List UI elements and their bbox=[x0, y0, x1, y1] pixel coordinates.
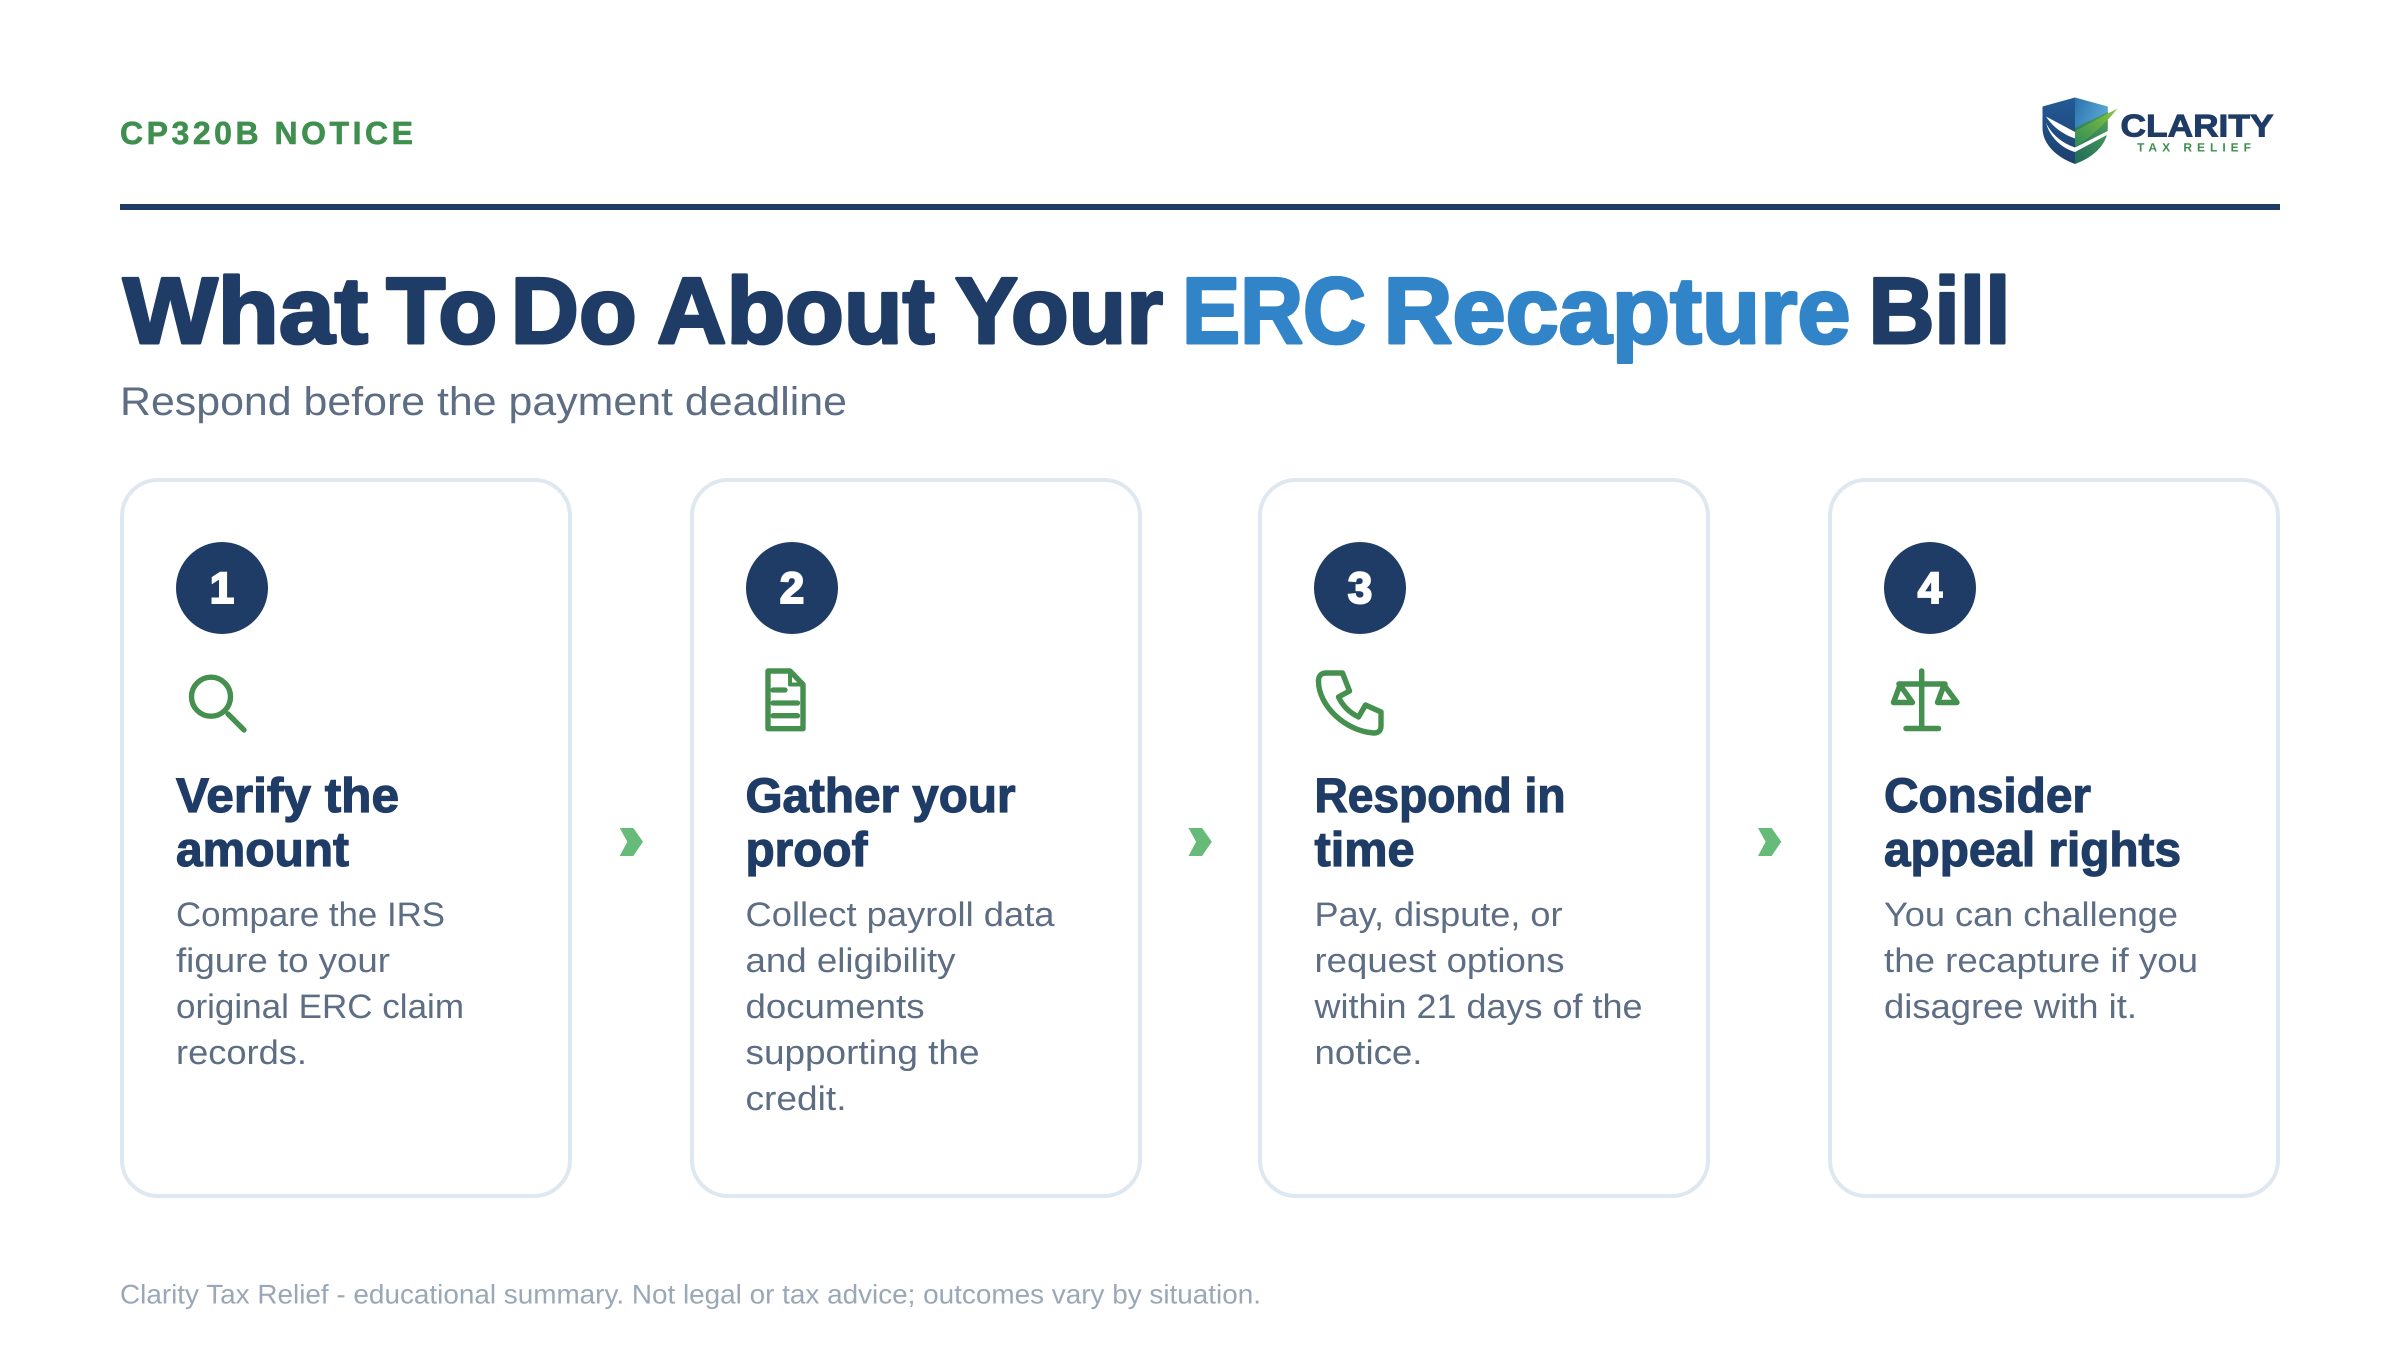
body text 1: figure to your bbox=[176, 942, 390, 980]
card frame 3 bbox=[1260, 480, 1708, 1196]
body text 3: within 21 days of the bbox=[1313, 988, 1642, 1026]
logo tagline: TAX RELIEF bbox=[2137, 141, 2251, 155]
number badge 1: 1 bbox=[210, 564, 234, 613]
body text 1: original ERC claim bbox=[176, 988, 464, 1026]
panel: step 1 verify the amount bbox=[122, 480, 570, 1196]
title: About bbox=[657, 258, 935, 363]
number badge 3 bbox=[1314, 542, 1406, 634]
body text 2: documents bbox=[746, 988, 924, 1026]
heading 4: Consider bbox=[1884, 769, 2091, 823]
body text 4: You can challenge bbox=[1884, 896, 2178, 934]
icon: document bbox=[768, 671, 803, 729]
body text 1 bbox=[176, 896, 464, 1072]
panel: step 3 respond in time bbox=[1260, 480, 1708, 1196]
icon: phone bbox=[1318, 673, 1381, 733]
card frame 1 bbox=[122, 480, 570, 1196]
heading 2 bbox=[746, 769, 1016, 877]
title: ERC bbox=[1182, 258, 1366, 363]
title bbox=[123, 258, 2010, 363]
number badge 2 bbox=[746, 542, 838, 634]
title: Recapture bbox=[1384, 258, 1850, 363]
panel: step 2 gather your proof bbox=[692, 480, 1140, 1196]
title: Do bbox=[511, 258, 637, 363]
title: What bbox=[123, 258, 368, 363]
body text 3: notice. bbox=[1314, 1034, 1422, 1072]
heading 2: proof bbox=[746, 823, 868, 877]
heading 1: amount bbox=[176, 823, 349, 877]
number badge 4: 4 bbox=[1918, 564, 1943, 613]
heading 4: appeal rights bbox=[1884, 823, 2181, 877]
icon: magnifying glass bbox=[192, 677, 244, 730]
header rule bbox=[120, 204, 2280, 210]
logo shield icon bbox=[2042, 98, 2118, 164]
arrow 2 to 3 bbox=[1188, 828, 1212, 856]
body text 1: records. bbox=[176, 1034, 307, 1072]
logo: Clarity Tax Relief bbox=[2042, 98, 2274, 164]
body text 4: disagree with it. bbox=[1884, 988, 2137, 1026]
footer disclaimer: Clarity Tax Relief - educational summary. Not legal or tax advice; outcomes vary by situation. bbox=[120, 1280, 1261, 1310]
heading 3 bbox=[1314, 769, 1566, 877]
number badge 4 bbox=[1884, 542, 1976, 634]
number badge 3: 3 bbox=[1348, 564, 1372, 613]
logo wordmark: CLARITY bbox=[2120, 108, 2274, 144]
body text 3: request options bbox=[1314, 942, 1564, 980]
body text 2: Collect payroll data bbox=[746, 896, 1055, 934]
body text 2: supporting the bbox=[746, 1034, 980, 1072]
number badge 2: 2 bbox=[780, 564, 804, 613]
number badge 1 bbox=[176, 542, 268, 634]
panel: step 4 consider appeal rights bbox=[1830, 480, 2278, 1196]
title: Your bbox=[955, 258, 1163, 363]
card frame 4 bbox=[1830, 480, 2278, 1196]
arrow 3 to 4 bbox=[1758, 828, 1781, 856]
body text 2: credit. bbox=[746, 1080, 846, 1118]
subtitle: Respond before the payment deadline bbox=[120, 380, 847, 424]
heading 3: time bbox=[1314, 823, 1414, 877]
body text 2: and eligibility bbox=[746, 942, 956, 980]
heading 1 bbox=[176, 769, 399, 877]
body text 3: Pay, dispute, or bbox=[1314, 896, 1562, 934]
body text 1: Compare the IRS bbox=[176, 896, 445, 934]
heading 4 bbox=[1884, 769, 2181, 877]
title: To bbox=[386, 258, 497, 363]
heading 2: Gather your bbox=[746, 769, 1016, 823]
arrow 1 to 2 bbox=[620, 828, 643, 856]
title: Bill bbox=[1868, 258, 2010, 363]
body text 3 bbox=[1313, 896, 1642, 1072]
eyebrow: CP320B NOTICE: CP320B NOTICE bbox=[120, 115, 413, 151]
body text 4 bbox=[1884, 896, 2198, 1026]
body text 4: the recapture if you bbox=[1884, 942, 2198, 980]
heading 1: Verify the bbox=[176, 769, 399, 823]
body text 2 bbox=[746, 896, 1055, 1118]
icon: balance scales bbox=[1894, 671, 1957, 728]
card frame 2 bbox=[692, 480, 1140, 1196]
heading 3: Respond in bbox=[1314, 769, 1566, 823]
